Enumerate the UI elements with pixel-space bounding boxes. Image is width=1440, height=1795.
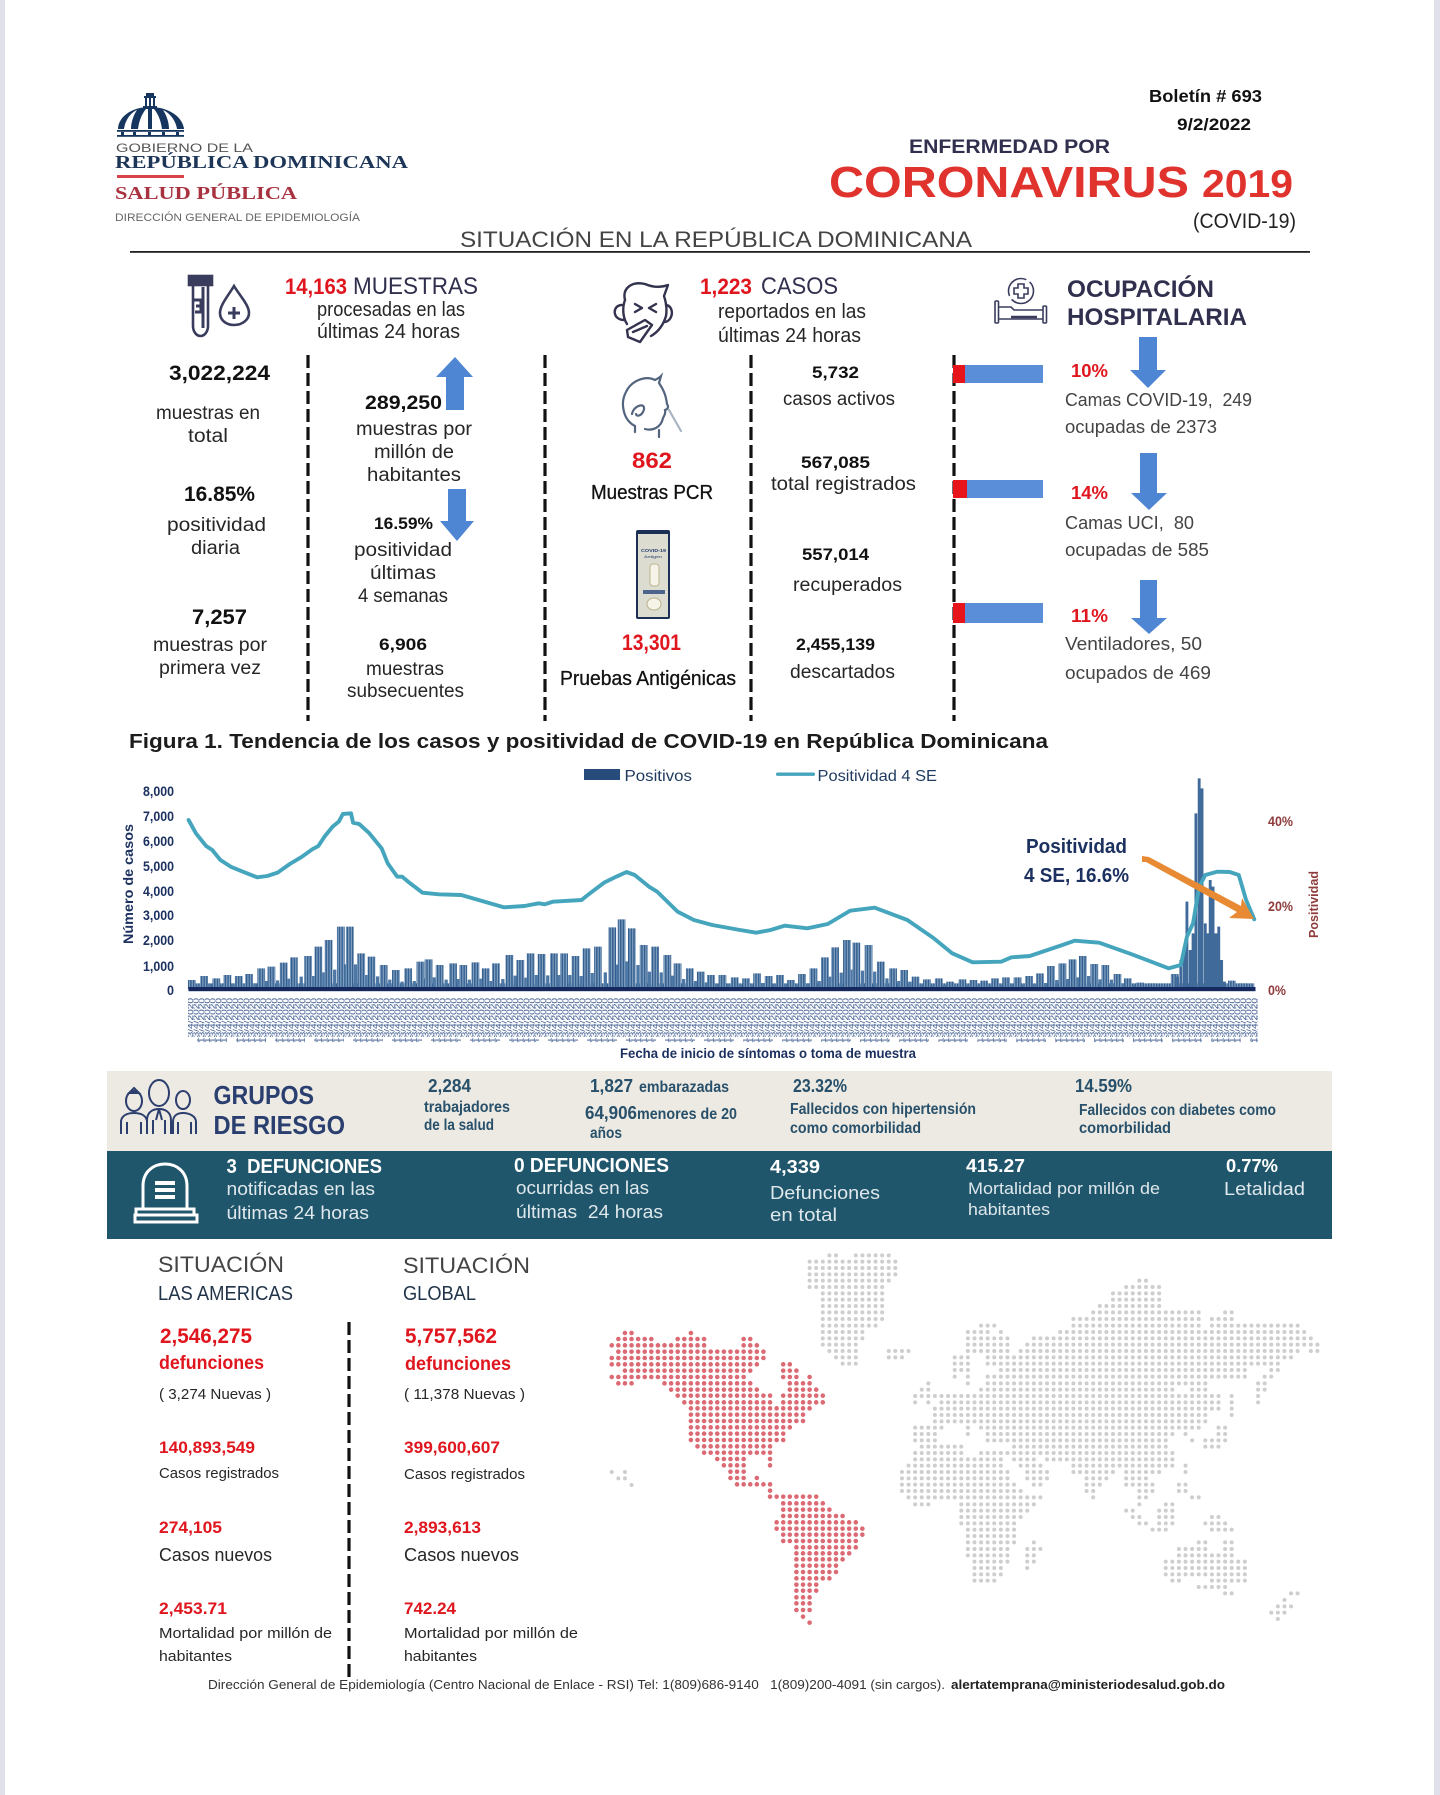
panel: muestras left column: positividad bbox=[167, 515, 266, 536]
panel: defunciones bbox=[107, 1151, 1332, 1239]
arrows: ocupación down bbox=[1130, 337, 1167, 634]
panel: ocupación labels: 11% bbox=[1071, 606, 1108, 626]
bar: ventiladores 11% bbox=[953, 603, 1043, 623]
icon: antigen test kit: COVID-19 bbox=[641, 548, 667, 553]
panel: situación las Américas: LAS AMERICAS bbox=[158, 1283, 293, 1305]
panel: situación las Américas bbox=[158, 1252, 332, 1665]
panel: situación global: defunciones bbox=[405, 1354, 511, 1375]
stat: mortalidad: 415.27 bbox=[966, 1156, 1025, 1176]
panel: muestras left column: diaria bbox=[191, 538, 240, 559]
panel: situación las Américas: 140,893,549 bbox=[159, 1438, 255, 1457]
right axis labels: 20% bbox=[1268, 899, 1293, 914]
panel: ocupación labels: 10% bbox=[1071, 361, 1108, 381]
arrow up: muestras por millón bbox=[436, 357, 473, 410]
stat: trabajadores de la salud: de la salud bbox=[424, 1117, 494, 1134]
y axis labels: 1,000 bbox=[143, 958, 174, 974]
panel: pruebas PCR and antigénicas: 862 bbox=[632, 448, 672, 473]
panel: situación global: habitantes bbox=[404, 1648, 477, 1665]
panel: situación global: SITUACIÓN bbox=[403, 1253, 530, 1278]
stat: defunciones en total bbox=[770, 1157, 880, 1225]
panel: pruebas PCR and antigénicas: Pruebas Antigénicas bbox=[560, 668, 736, 690]
panel: muestras left column: total bbox=[188, 426, 228, 447]
stat: defunciones ocurridas: últimas 24 horas bbox=[516, 1201, 663, 1222]
logo: Gobierno de la República Dominicana, Salud Pública: REPÚBLICA DOMINICANA bbox=[115, 152, 408, 172]
stat: defunciones en total: en total bbox=[770, 1204, 837, 1225]
stat: trabajadores de la salud bbox=[424, 1076, 510, 1134]
panel: situación las Américas: 2,453.71 bbox=[159, 1599, 227, 1618]
panel: ocupación labels: Camas COVID-19, 249 bbox=[1065, 390, 1252, 410]
panel: situación global: Casos registrados bbox=[404, 1466, 525, 1483]
panel: situación global: GLOBAL bbox=[403, 1283, 476, 1305]
logo: Gobierno de la República Dominicana, Salud Pública bbox=[115, 93, 408, 224]
heading: muestras: últimas 24 horas bbox=[317, 321, 460, 343]
heading: muestras: procesadas en las bbox=[317, 299, 465, 321]
heading: casos bbox=[700, 273, 866, 347]
stat: diabetes: comorbilidad bbox=[1079, 1120, 1171, 1137]
x axis date labels bbox=[188, 997, 1258, 1045]
stat: letalidad bbox=[1224, 1156, 1305, 1199]
right axis labels: Positividad bbox=[1306, 871, 1321, 938]
panel: situación las Américas: Casos nuevos bbox=[159, 1545, 272, 1565]
stat: diabetes: 14.59% bbox=[1075, 1076, 1132, 1096]
y axis labels: 0 bbox=[167, 982, 174, 998]
panel: situación global: 2,893,613 bbox=[404, 1518, 481, 1537]
stat: hipertensión bbox=[790, 1076, 976, 1137]
panel: situación global: Casos nuevos bbox=[404, 1545, 519, 1565]
bars: positive cases bbox=[189, 778, 1254, 989]
panel: muestras second column: habitantes bbox=[367, 465, 461, 486]
heading: muestras: MUESTRAS bbox=[353, 273, 478, 300]
panel: ocupación labels: 14% bbox=[1071, 483, 1108, 503]
legend bbox=[584, 768, 937, 785]
panel: casos column: recuperados bbox=[793, 575, 902, 596]
panel: situación las Américas: habitantes bbox=[159, 1648, 232, 1665]
stat: mortalidad: Mortalidad por millón de bbox=[968, 1179, 1160, 1198]
panel: muestras left column: muestras en bbox=[156, 403, 260, 424]
arrow: orange pointer bbox=[1142, 856, 1254, 919]
panel: muestras left column: 7,257 bbox=[192, 606, 247, 629]
stat: embarazadas y menores: 64,906 bbox=[585, 1103, 637, 1123]
y axis labels: 5,000 bbox=[143, 858, 174, 874]
bulletin number and date: 9/2/2022 bbox=[1177, 115, 1251, 134]
panel: situación las Américas: defunciones bbox=[159, 1353, 264, 1374]
icon: people bbox=[121, 1080, 196, 1134]
right axis labels: 0% bbox=[1268, 983, 1286, 998]
stat: defunciones notificadas: notificadas en las bbox=[226, 1178, 375, 1199]
stat: embarazadas y menores: menores de 20 bbox=[637, 1106, 737, 1123]
heading: casos: CASOS bbox=[761, 273, 838, 300]
panel: muestras second column: positividad bbox=[354, 540, 452, 561]
panel: casos column: total registrados bbox=[771, 474, 916, 495]
figure heading: Figura 1. Tendencia de los casos y positividad de COVID-19 en República Dominicana bbox=[129, 731, 1049, 753]
title bbox=[829, 136, 1296, 233]
stat: diabetes bbox=[1075, 1076, 1276, 1137]
panel: muestras second column: 289,250 bbox=[365, 393, 442, 414]
panel: ocupación labels: ocupadas de 2373 bbox=[1065, 417, 1217, 437]
heading: grupos de riesgo bbox=[214, 1080, 345, 1140]
line: positivity 4 SE bbox=[189, 813, 1254, 968]
panel: muestras second column: millón de bbox=[374, 442, 454, 463]
heading: ocupación hospitalaria bbox=[1067, 275, 1247, 331]
stat: embarazadas y menores: años bbox=[590, 1125, 622, 1142]
bulletin number and date: Boletín # 693 bbox=[1149, 86, 1262, 106]
panel: situación las Américas: 2,546,275 bbox=[160, 1325, 252, 1348]
axis baseline bbox=[188, 987, 1256, 991]
panel: muestras second column: últimas bbox=[370, 563, 436, 584]
icon: nasal swab head bbox=[623, 376, 681, 437]
panel: muestras second column: 6,906 bbox=[379, 635, 427, 654]
stat: defunciones notificadas: 3 DEFUNCIONES bbox=[226, 1156, 382, 1178]
panel: ocupación labels bbox=[1065, 361, 1252, 683]
y axis labels: 2,000 bbox=[143, 932, 174, 948]
stat: embarazadas y menores: 1,827 bbox=[590, 1076, 633, 1096]
icon: sneezing face with mask bbox=[615, 283, 672, 342]
dotted world map bbox=[612, 1255, 1319, 1623]
stat: hipertensión: Fallecidos con hipertensión bbox=[790, 1101, 976, 1118]
panel: situación las Américas: Mortalidad por millón de bbox=[159, 1625, 332, 1642]
panel: muestras left column bbox=[153, 362, 270, 679]
bulletin number and date bbox=[1149, 86, 1262, 134]
panel: pruebas PCR and antigénicas: 13,301 bbox=[622, 630, 681, 655]
icon: dome bbox=[117, 93, 184, 137]
heading: casos: reportados en las bbox=[718, 301, 866, 323]
icon: test tube and drop bbox=[189, 276, 249, 336]
icon: hospital bed bbox=[995, 278, 1046, 323]
stat: defunciones notificadas: últimas 24 horas bbox=[226, 1202, 369, 1223]
y axis labels: 7,000 bbox=[143, 808, 174, 824]
stat: defunciones en total: Defunciones bbox=[770, 1182, 880, 1203]
stat: embarazadas y menores: embarazadas bbox=[639, 1079, 729, 1096]
panel: situación las Américas: Casos registrados bbox=[159, 1465, 279, 1482]
stat: trabajadores de la salud: trabajadores bbox=[424, 1099, 510, 1116]
heading: muestras bbox=[285, 273, 478, 343]
title: (COVID-19) bbox=[1193, 210, 1296, 233]
stat: defunciones ocurridas: ocurridas en las bbox=[516, 1177, 649, 1198]
icon: antigen test kit bbox=[636, 530, 670, 619]
panel: casos column: descartados bbox=[790, 662, 895, 683]
y axis labels: 4,000 bbox=[143, 883, 174, 899]
panel: ocupación labels: ocupadas de 585 bbox=[1065, 540, 1209, 560]
stat: letalidad: 0.77% bbox=[1226, 1156, 1278, 1176]
panel: situación las Américas: SITUACIÓN bbox=[158, 1252, 284, 1277]
stat: mortalidad: habitantes bbox=[968, 1200, 1050, 1219]
panel: situación global bbox=[403, 1253, 578, 1665]
panel: ocupación hospitalaria bars bbox=[953, 365, 1043, 623]
panel: casos column: 567,085 bbox=[801, 453, 870, 472]
legend: Positividad 4 SE bbox=[818, 768, 937, 785]
arrow down: positividad bbox=[440, 489, 474, 541]
panel: casos column: 557,014 bbox=[802, 545, 870, 564]
callout: positividad 16.6% bbox=[1024, 836, 1129, 887]
heading: casos: 1,223 bbox=[700, 274, 752, 299]
title: 2019 bbox=[1202, 163, 1293, 206]
panel: situación las Américas: 274,105 bbox=[159, 1518, 222, 1537]
stat: defunciones en total: 4,339 bbox=[770, 1157, 820, 1177]
panel: situación las Américas: ( 3,274 Nuevas ) bbox=[159, 1386, 271, 1403]
title: CORONAVIRUS bbox=[829, 158, 1189, 207]
panel: ocupación labels: Ventiladores, 50 bbox=[1065, 634, 1202, 654]
legend: Positivos bbox=[624, 768, 692, 785]
icon: tombstone bbox=[135, 1164, 197, 1222]
heading: ocupación hospitalaria: OCUPACIÓN bbox=[1067, 275, 1214, 303]
stat: embarazadas y menores bbox=[585, 1076, 737, 1142]
panel: ocupación labels: Camas UCI, 80 bbox=[1065, 513, 1194, 533]
panel: muestras left column: 3,022,224 bbox=[169, 362, 270, 385]
panel: muestras second column: subsecuentes bbox=[347, 681, 464, 702]
stat: defunciones notificadas bbox=[226, 1156, 382, 1223]
heading: grupos de riesgo: DE RIESGO bbox=[214, 1110, 345, 1140]
subtitle: SITUACIÓN EN LA REPÚBLICA DOMINICANA bbox=[460, 227, 972, 252]
stat: mortalidad bbox=[966, 1156, 1160, 1219]
y axis labels bbox=[143, 783, 174, 998]
panel: casos column bbox=[771, 363, 916, 683]
panel: muestras left column: 16.85% bbox=[184, 483, 255, 506]
footer bbox=[208, 1678, 1225, 1692]
right axis labels: 40% bbox=[1268, 814, 1293, 829]
panel: muestras left column: primera vez bbox=[159, 658, 261, 679]
footer: alertatemprana@ministeriodesalud.gob.do bbox=[951, 1678, 1225, 1692]
chart: cases and positivity trend bbox=[120, 768, 1321, 1061]
panel: muestras second column bbox=[347, 393, 473, 702]
panel: grupos de riesgo bbox=[107, 1071, 1332, 1151]
panel: muestras second column: 4 semanas bbox=[358, 586, 448, 607]
panel: muestras second column: muestras por bbox=[356, 419, 473, 440]
panel: muestras left column: muestras por bbox=[153, 635, 268, 656]
right axis labels bbox=[1268, 814, 1321, 998]
logo: Gobierno de la República Dominicana, Salud Pública: DIRECCIÓN GENERAL DE EPIDEMIOLOGÍA bbox=[115, 211, 361, 224]
stat: defunciones ocurridas bbox=[514, 1155, 669, 1222]
stat: hipertensión: como comorbilidad bbox=[790, 1120, 921, 1137]
panel: pruebas PCR and antigénicas: Muestras PCR bbox=[591, 482, 713, 504]
heading: muestras: 14,163 bbox=[285, 274, 347, 299]
stat: trabajadores de la salud: 2,284 bbox=[428, 1076, 471, 1096]
y axis labels: 3,000 bbox=[143, 907, 174, 923]
y axis labels: 6,000 bbox=[143, 833, 174, 849]
bar: camas COVID 10% bbox=[953, 365, 1043, 383]
panel: casos column: 2,455,139 bbox=[796, 635, 875, 654]
panel: situación global: ( 11,378 Nuevas ) bbox=[404, 1386, 525, 1403]
y axis labels: 8,000 bbox=[143, 783, 174, 799]
heading: grupos de riesgo: GRUPOS bbox=[214, 1080, 314, 1110]
callout: positividad 16.6%: Positividad bbox=[1026, 836, 1127, 858]
stat: defunciones ocurridas: 0 DEFUNCIONES bbox=[514, 1155, 669, 1177]
stat: diabetes: Fallecidos con diabetes como bbox=[1079, 1102, 1276, 1119]
panel: situación global: 399,600,607 bbox=[404, 1438, 500, 1457]
callout: positividad 16.6%: 4 SE, 16.6% bbox=[1024, 865, 1129, 887]
footer: Dirección General de Epidemiología (Centro Nacional de Enlace - RSI) Tel: 1(809)686-9140 1(809)200-4091 (sin cargos). bbox=[208, 1678, 945, 1692]
panel: casos column: 5,732 bbox=[812, 363, 859, 382]
icon: antigen test kit: Antigen bbox=[644, 554, 662, 559]
panel: situación global: 5,757,562 bbox=[405, 1325, 497, 1348]
panel: pruebas PCR and antigénicas bbox=[560, 448, 736, 690]
panel: casos column: casos activos bbox=[783, 389, 895, 410]
title: ENFERMEDAD POR bbox=[909, 136, 1110, 158]
heading: ocupación hospitalaria: HOSPITALARIA bbox=[1067, 304, 1247, 331]
bar: camas UCI 14% bbox=[953, 480, 1043, 498]
x axis title: Fecha de inicio de síntomas o toma de muestra bbox=[620, 1046, 916, 1061]
y axis title: Número de casos bbox=[120, 824, 136, 944]
panel: situación global: Mortalidad por millón de bbox=[404, 1625, 578, 1642]
stat: letalidad: Letalidad bbox=[1224, 1178, 1305, 1199]
panel: muestras second column: 16.59% bbox=[374, 514, 433, 533]
panel: ocupación labels: ocupados de 469 bbox=[1065, 663, 1211, 683]
logo: Gobierno de la República Dominicana, Salud Pública: GOBIERNO DE LA bbox=[116, 141, 253, 155]
heading: casos: últimas 24 horas bbox=[718, 325, 861, 347]
stat: hipertensión: 23.32% bbox=[793, 1076, 847, 1096]
panel: muestras second column: muestras bbox=[366, 659, 444, 680]
logo: Gobierno de la República Dominicana, Salud Pública: SALUD PÚBLICA bbox=[115, 182, 297, 203]
panel: situación global: 742.24 bbox=[404, 1599, 457, 1618]
